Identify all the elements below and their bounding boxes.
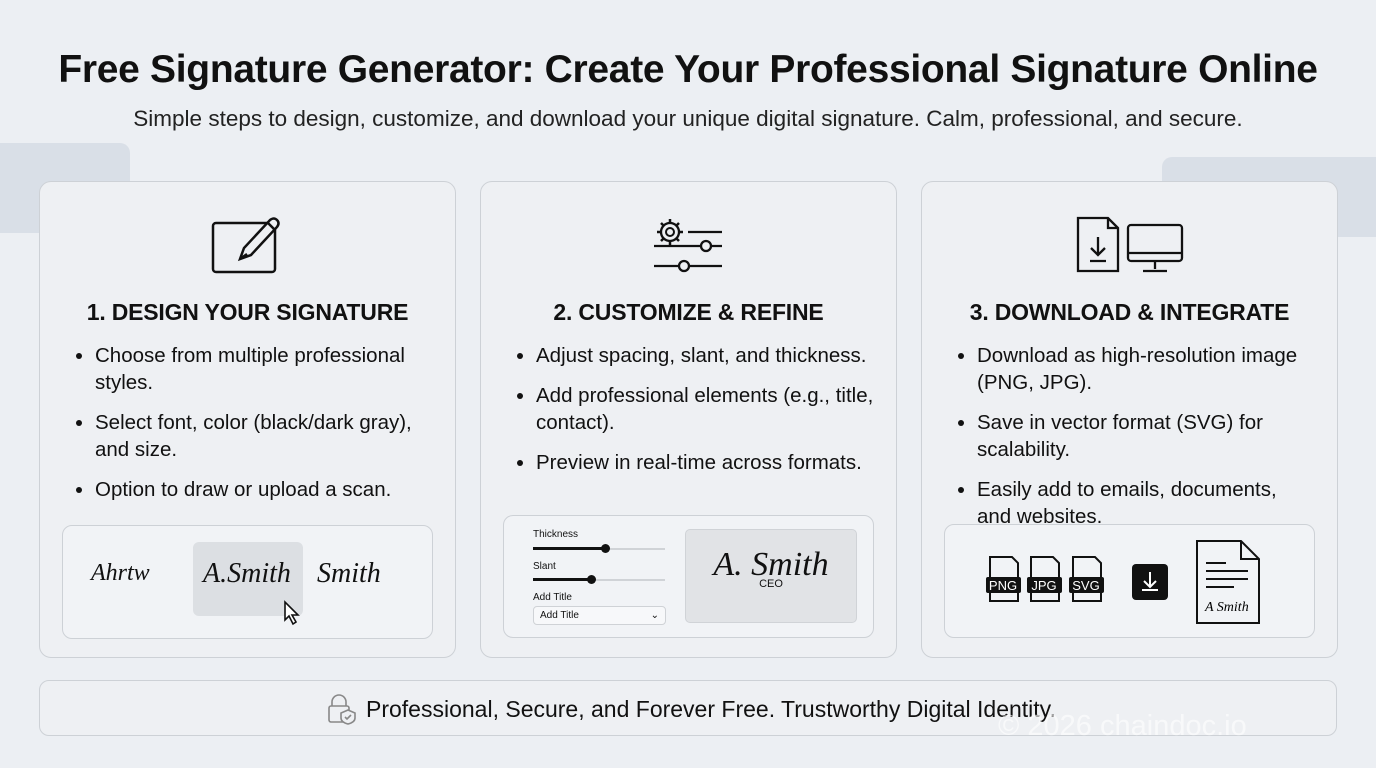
icon: gear sliders (654, 219, 722, 272)
bullets: Easily add to emails, documents, (977, 478, 1277, 501)
panel: customize (480, 181, 897, 658)
panel: download (921, 181, 1338, 658)
bullets: Choose from multiple professional (95, 344, 405, 367)
footer text: Professional, Secure, and Forever Free. Trustworthy Digital Identity. (366, 696, 1056, 722)
format icons and document: PNG (989, 578, 1017, 593)
bullets: scalability. (977, 438, 1070, 461)
bullets: Adjust spacing, slant, and thickness. (536, 344, 866, 367)
footer banner (39, 680, 1337, 736)
bullets (517, 344, 873, 474)
bullets (76, 344, 412, 501)
bullets: and websites. (977, 505, 1102, 528)
heading: 3. DOWNLOAD & INTEGRATE (970, 299, 1289, 325)
title: Free Signature Generator: Create Your Professional Signature Online (58, 48, 1318, 91)
bullets: styles. (95, 371, 153, 394)
format icons and document (944, 524, 1315, 638)
icon: signed document (1196, 540, 1260, 624)
signature samples (62, 525, 433, 639)
icon: signed document: A Smith (1204, 600, 1249, 615)
bullets: Select font, color (black/dark gray), (95, 411, 412, 434)
bullets: Download as high-resolution image (977, 344, 1297, 367)
controls and preview: Add Title (533, 592, 572, 603)
controls and preview: ⌄ (651, 610, 659, 621)
bullets (958, 344, 1297, 528)
bullets: Preview in real-time across formats. (536, 451, 862, 474)
signature samples: A.Smith (203, 558, 291, 589)
controls and preview: A. Smith (713, 546, 829, 583)
icon: file and monitor (1076, 216, 1184, 272)
watermark: © 2026 chaindoc.io (998, 710, 1247, 742)
signature samples: Smith (317, 558, 381, 589)
controls and preview (503, 515, 874, 638)
controls and preview: Slant (533, 561, 556, 572)
format icons and document: JPG (1031, 578, 1057, 593)
bullets: and size. (95, 438, 177, 461)
controls and preview: Thickness (533, 529, 578, 540)
controls and preview: CEO (759, 578, 783, 590)
icon: download (1132, 564, 1168, 600)
bullets: Add professional elements (e.g., title, (536, 384, 873, 407)
bullets: Option to draw or upload a scan. (95, 478, 391, 501)
bullets: (PNG, JPG). (977, 371, 1092, 394)
heading: 1. DESIGN YOUR SIGNATURE (87, 299, 408, 325)
format icons and document: SVG (1072, 578, 1100, 593)
bullets: contact). (536, 411, 615, 434)
bullets: Save in vector format (SVG) for (977, 411, 1263, 434)
controls and preview: Add Title (540, 610, 579, 621)
subtitle: Simple steps to design, customize, and download your unique digital signature. Calm, professional, and secure. (133, 106, 1243, 131)
icon: pen on tablet (212, 217, 280, 274)
panel: design (39, 181, 456, 658)
signature samples: Ahrtw (91, 560, 150, 586)
icon: lock shield (328, 694, 356, 725)
heading: 2. CUSTOMIZE & REFINE (553, 299, 824, 325)
